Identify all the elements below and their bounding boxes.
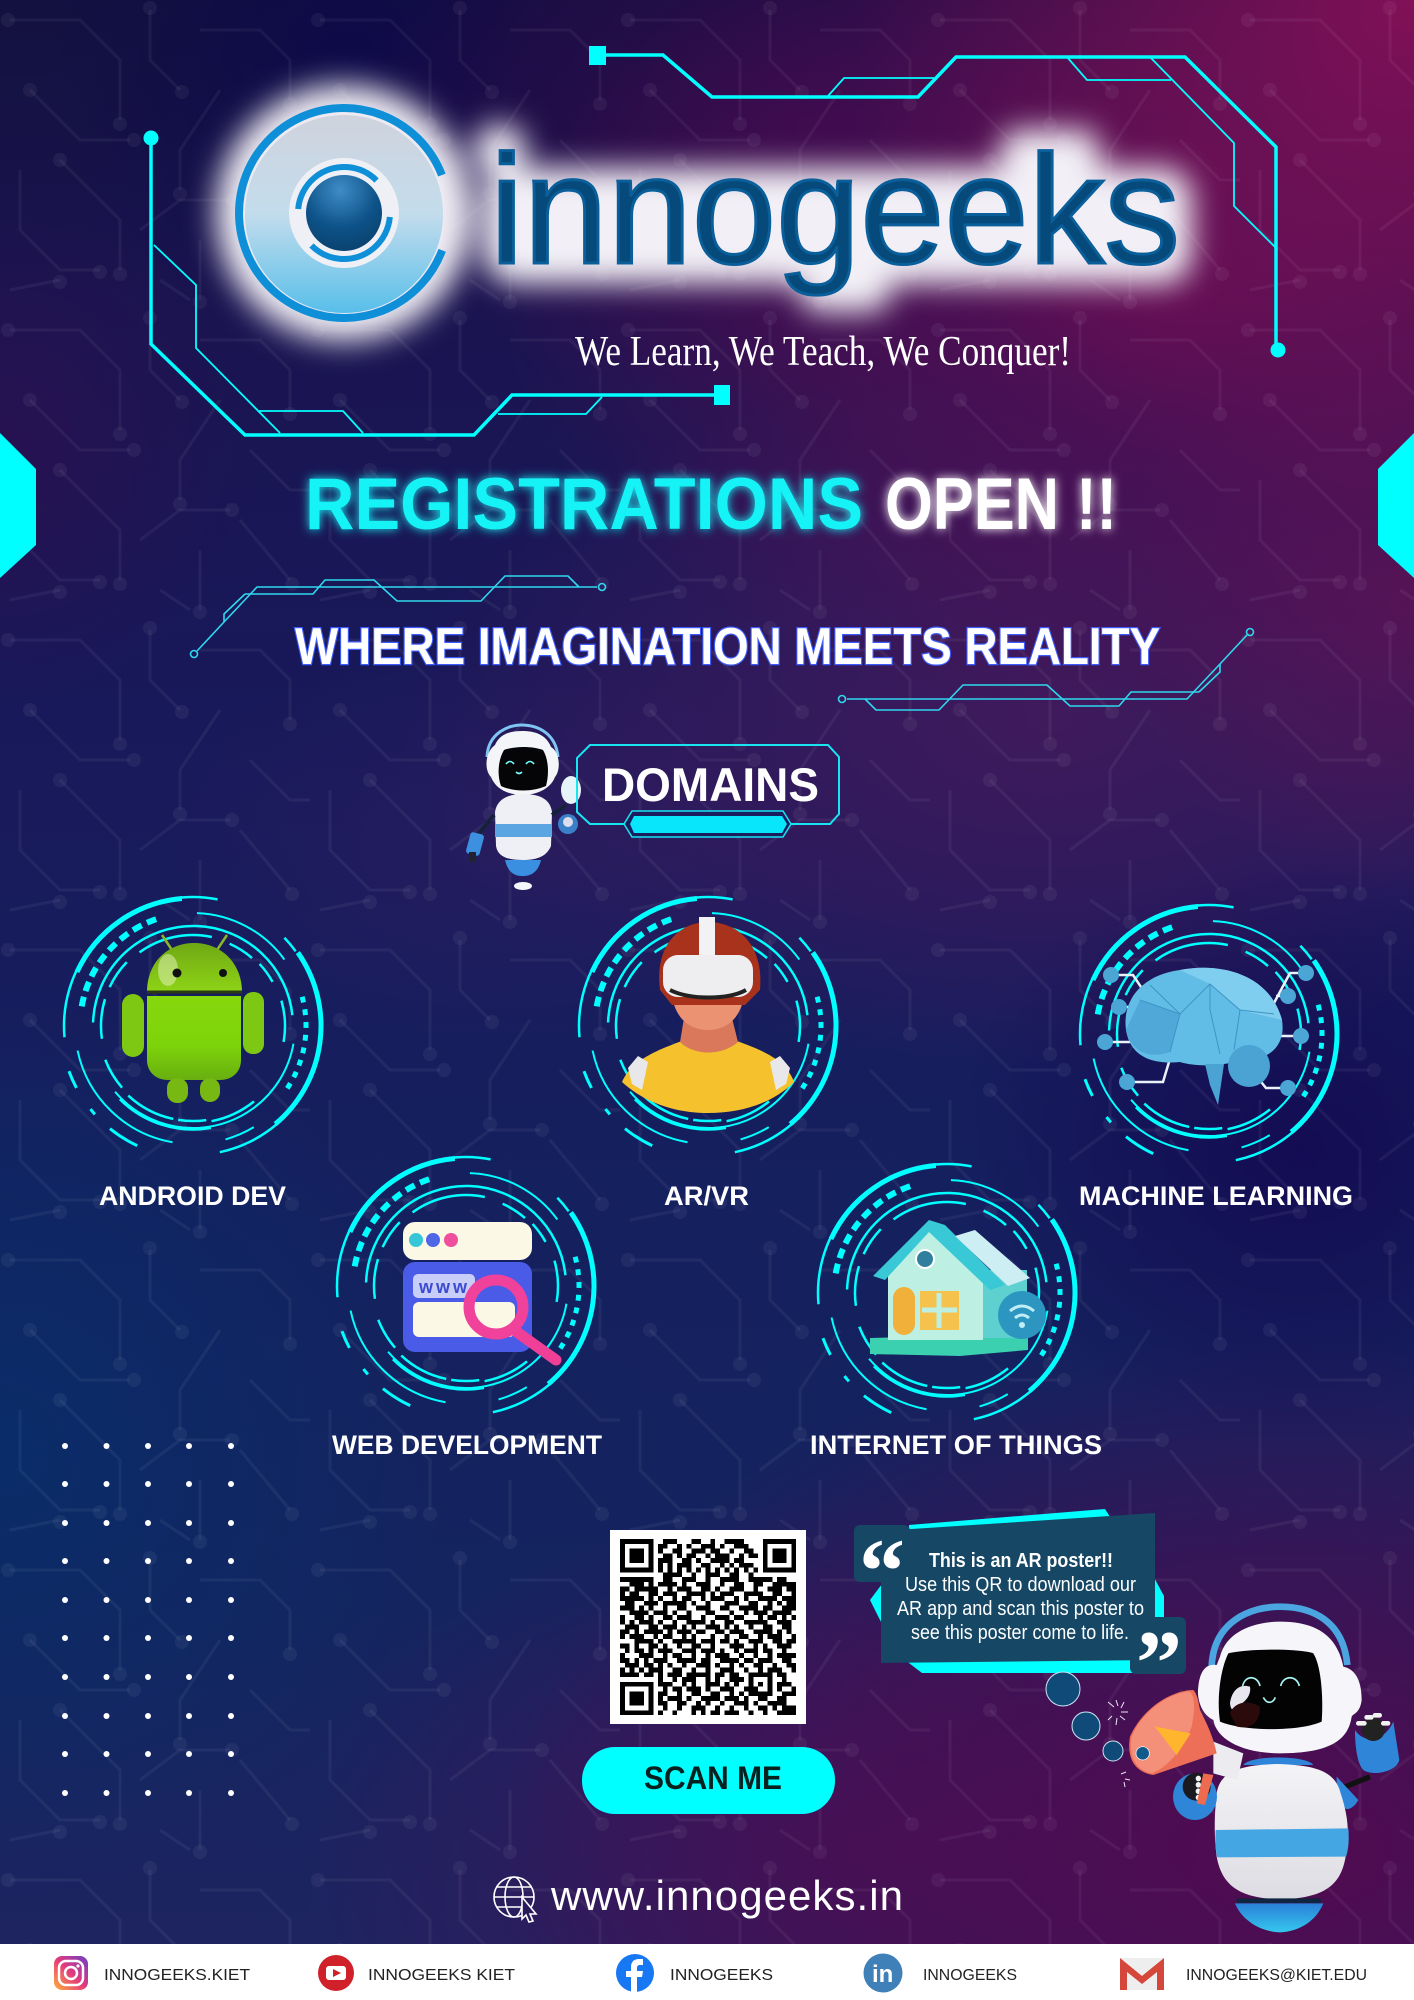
domains bar xyxy=(624,811,791,837)
side accent right xyxy=(1378,433,1414,578)
website line xyxy=(494,1872,903,1922)
domain: ar/vr xyxy=(522,840,894,1212)
domains title: DOMAINS xyxy=(602,758,819,811)
icon: linkedin xyxy=(864,1954,902,1992)
speech bubbles xyxy=(1046,1672,1123,1761)
robot head xyxy=(1198,1622,1362,1753)
robot neck xyxy=(1243,1757,1313,1765)
headline white part: OPEN !! xyxy=(885,464,1117,545)
icon: person with vr headset xyxy=(622,917,794,1113)
callout left tab xyxy=(854,1525,910,1582)
icon: globe with cursor xyxy=(494,1877,536,1922)
sparkles xyxy=(1108,1700,1130,1787)
icon: smart house xyxy=(870,1220,1046,1356)
robot face xyxy=(1243,1678,1299,1702)
ar/vr label: AR/VR xyxy=(664,1181,749,1211)
facebook handle: INNOGEEKS xyxy=(670,1967,773,1984)
speech callout xyxy=(854,1509,1186,1714)
domains frame xyxy=(577,745,839,824)
machine learning label: MACHINE LEARNING xyxy=(1079,1181,1353,1211)
megaphone xyxy=(1213,1742,1243,1780)
icon: linkedin: in xyxy=(872,1961,893,1988)
web ring xyxy=(280,1100,652,1472)
qr code xyxy=(610,1530,806,1724)
logo ring emblem xyxy=(208,77,480,349)
iot ring xyxy=(761,1107,1133,1479)
ar/vr ring xyxy=(522,840,894,1212)
icon: browser and magnifier xyxy=(403,1222,556,1360)
side accent left xyxy=(0,433,36,578)
icon: facebook xyxy=(616,1954,654,1992)
icon: youtube xyxy=(318,1955,354,1991)
headset band xyxy=(1212,1607,1347,1667)
left hand xyxy=(1173,1773,1217,1820)
tagline: We Learn, We Teach, We Conquer! xyxy=(575,329,1071,375)
circuit accent right xyxy=(838,628,1254,710)
logo: innogeeks xyxy=(208,77,1192,349)
robot body xyxy=(1215,1764,1348,1899)
small robot mascot xyxy=(465,725,581,890)
closing quote mark: ” xyxy=(1136,1612,1182,1714)
callout panel xyxy=(881,1513,1155,1663)
website url: www.innogeeks.in xyxy=(550,1872,903,1919)
headline: registrations open xyxy=(305,464,1117,545)
opening quote mark: “ xyxy=(859,1520,905,1622)
callout text: This is an AR poster!! xyxy=(929,1550,1113,1572)
subtitle: WHERE IMAGINATION MEETS REALITY xyxy=(295,618,1160,676)
dot grid decoration xyxy=(62,1443,234,1796)
domain: machine learning xyxy=(1023,848,1395,1220)
domains heading box xyxy=(577,745,839,837)
youtube handle: INNOGEEKS KIET xyxy=(368,1967,515,1984)
instagram handle: INNOGEEKS.KIET xyxy=(104,1967,250,1984)
iot label: INTERNET OF THINGS xyxy=(810,1430,1102,1460)
icon: android robot xyxy=(122,935,264,1103)
scan me button xyxy=(582,1747,835,1814)
large robot with megaphone xyxy=(1129,1607,1399,1932)
machine learning ring xyxy=(1023,848,1395,1220)
callout right tab xyxy=(1130,1617,1186,1674)
icon: instagram xyxy=(54,1956,88,1990)
callout cyan accents xyxy=(870,1509,1164,1673)
scan me button: SCAN ME xyxy=(644,1760,782,1796)
android ring xyxy=(7,840,379,1212)
domain: android dev xyxy=(7,840,379,1212)
circuit frame around logo xyxy=(144,46,1286,435)
robot body band xyxy=(1215,1828,1349,1857)
robot base xyxy=(1237,1894,1321,1908)
logo white glow xyxy=(216,85,1192,341)
callout text xyxy=(897,1550,1144,1644)
icon: gmail xyxy=(1120,1958,1164,1990)
logo wordmark: innogeeks xyxy=(490,123,1180,296)
linkedin handle: INNOGEEKS xyxy=(923,1967,1017,1984)
web label: WEB DEVELOPMENT xyxy=(332,1430,602,1460)
circuit accent left xyxy=(190,576,606,658)
right arm xyxy=(1342,1777,1370,1788)
android label: ANDROID DEV xyxy=(99,1181,286,1211)
icon: browser and magnifier: www xyxy=(418,1277,468,1297)
icon: low poly brain with nodes xyxy=(1097,965,1314,1105)
footer bar xyxy=(0,1944,1414,2000)
robot visor xyxy=(1219,1650,1322,1729)
callout text: see this poster come to life. xyxy=(911,1622,1129,1644)
callout text: AR app and scan this poster to xyxy=(897,1598,1144,1620)
headline cyan part: REGISTRATIONS xyxy=(305,464,863,545)
domain: web development xyxy=(280,1100,652,1472)
email address: INNOGEEKS@KIET.EDU xyxy=(1186,1967,1367,1984)
callout text: Use this QR to download our xyxy=(905,1574,1136,1596)
domain: internet of things xyxy=(761,1107,1133,1479)
